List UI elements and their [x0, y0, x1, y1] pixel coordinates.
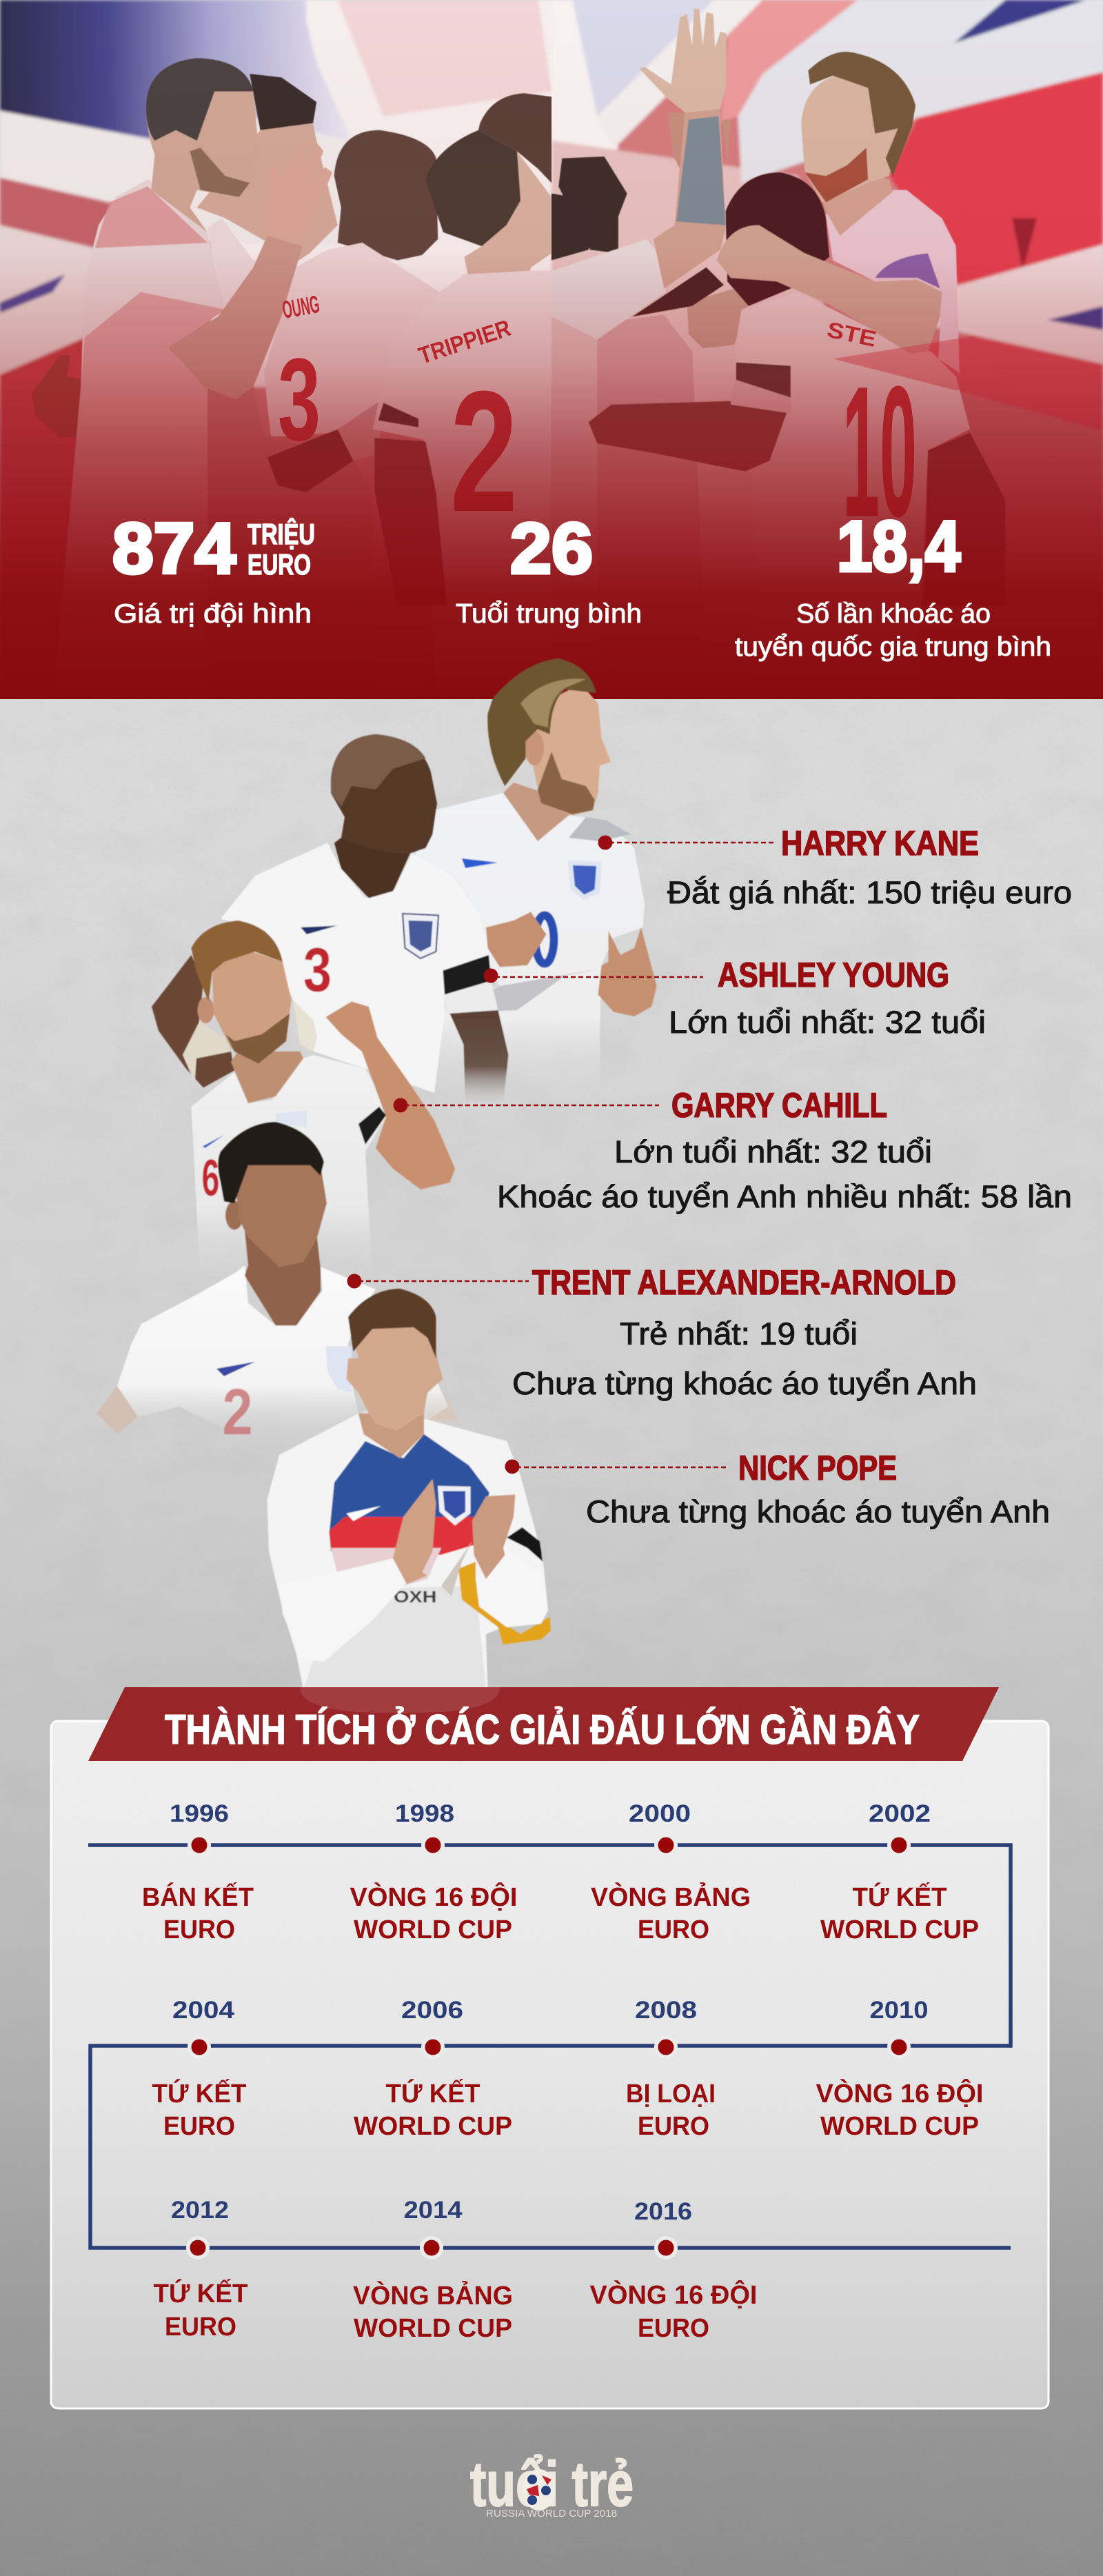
- hero shirt names and numbers: STE: [825, 317, 878, 352]
- hero red gradient overlay: [0, 0, 1103, 699]
- callout: Garry Cahill: GARRY CAHILL: [671, 1086, 887, 1125]
- callout: Garry Cahill: [393, 1086, 1072, 1214]
- callouts and captions: [347, 824, 1072, 1529]
- timeline years: 2008: [635, 1997, 697, 2024]
- callout: Trent Alexander-Arnold: TRENT ALEXANDER-ARNOLD: [532, 1263, 956, 1302]
- player: Trent Alexander-Arnold: [97, 1122, 458, 1449]
- timeline years: 2012: [171, 2197, 229, 2224]
- icon: world cup ball: [523, 2469, 556, 2510]
- timeline results: TỨ KẾT: [153, 2278, 248, 2308]
- callout: Harry Kane: HARRY KANE: [781, 824, 979, 863]
- timeline years: 2006: [401, 1997, 463, 2024]
- timeline results: VÒNG BẢNG: [591, 1882, 751, 1912]
- hero shirt names and numbers: TRIPPIER: [416, 315, 514, 370]
- stat: average age: [456, 509, 642, 629]
- timeline years: 2016: [634, 2198, 692, 2225]
- timeline results: VÒNG 16 ĐỘI: [816, 2077, 983, 2109]
- timeline results: WORLD CUP: [354, 2314, 512, 2343]
- timeline dots: [186, 1833, 911, 2260]
- callout: Garry Cahill: Khoác áo tuyển Anh nhiều nhất: 58 lần: [497, 1179, 1072, 1214]
- title banner: THÀNH TÍCH Ở CÁC GIẢI ĐẤU LỚN GẦN ĐÂY: [165, 1707, 920, 1753]
- timeline results: EURO: [163, 1915, 235, 1944]
- stat: average caps: [735, 507, 1051, 662]
- hero shirt names and numbers: OUNG: [280, 290, 322, 324]
- stat: average age: 26: [510, 509, 593, 589]
- player: Ashley Young: 3: [303, 936, 332, 1005]
- timeline years: 1996: [170, 1800, 229, 1827]
- timeline results: VÒNG 16 ĐỘI: [590, 2279, 757, 2310]
- timeline results: EURO: [165, 2313, 236, 2342]
- panel: hero team photo with stats: [0, 0, 1103, 703]
- stat: average age: Tuổi trung bình: [456, 599, 642, 629]
- timeline results: TỨ KẾT: [852, 1882, 947, 1912]
- timeline results: [142, 1881, 983, 2343]
- timeline years: 2010: [870, 1997, 928, 2024]
- stat: average caps: tuyển quốc gia trung bình: [735, 632, 1051, 662]
- player: Ashley Young: [152, 734, 509, 1103]
- callout: Ashley Young: ASHLEY YOUNG: [718, 956, 949, 994]
- logo: Tuoi Tre Russia World Cup 2018: tuổi trẻ: [470, 2449, 634, 2519]
- hero shirt names and numbers: [278, 290, 917, 556]
- timeline results: WORLD CUP: [820, 2112, 979, 2141]
- hero flag backdrop: [0, 0, 1103, 594]
- timeline results: BÁN KẾT: [142, 1882, 254, 1912]
- stat: squad value: TRIỆU: [247, 517, 315, 550]
- timeline results: WORLD CUP: [354, 1915, 512, 1944]
- timeline results: TỨ KẾT: [386, 2078, 480, 2109]
- timeline results: VÒNG BẢNG: [353, 2280, 513, 2311]
- stat: squad value: [112, 509, 315, 629]
- hero shirt names and numbers: 2: [450, 355, 518, 547]
- timeline years: 1998: [395, 1800, 454, 1827]
- stat: squad value: Giá trị đội hình: [114, 599, 312, 629]
- timeline years: 2000: [629, 1800, 691, 1827]
- callout: Ashley Young: Lớn tuổi nhất: 32 tuổi: [669, 1005, 986, 1040]
- stat: squad value: EURO: [247, 548, 311, 581]
- hero shirt names and numbers: 3: [278, 334, 321, 465]
- timeline years: 2014: [404, 2197, 463, 2224]
- logo: Tuoi Tre Russia World Cup 2018: RUSSIA WORLD CUP 2018: [486, 2508, 617, 2519]
- timeline results: EURO: [638, 2314, 709, 2343]
- callout: Harry Kane: Đắt giá nhất: 150 triệu euro: [667, 875, 1072, 910]
- timeline results: WORLD CUP: [820, 1915, 979, 1944]
- timeline years: 2004: [172, 1997, 235, 2024]
- callout: Nick Pope: [505, 1449, 1050, 1529]
- hero players right half: [552, 9, 1009, 703]
- timeline years: [170, 1800, 931, 2225]
- stat: average caps: Số lần khoác áo: [796, 599, 991, 629]
- callout: Harry Kane: [598, 824, 1072, 910]
- stat: squad value: 874: [112, 509, 236, 589]
- hero players left half: [32, 58, 552, 703]
- timeline results: VÒNG 16 ĐỘI: [350, 1881, 517, 1912]
- timeline results: TỨ KẾT: [152, 2078, 247, 2109]
- timeline results: EURO: [638, 1915, 709, 1944]
- callout: Nick Pope: Chưa từng khoác áo tuyển Anh: [586, 1494, 1050, 1529]
- timeline years: 2002: [869, 1800, 931, 1827]
- panel: tournament results: [51, 1687, 1049, 2408]
- callout: Trent Alexander-Arnold: Chưa từng khoác áo tuyển Anh: [512, 1366, 977, 1401]
- player: Nick Pope: OXH: [394, 1588, 437, 1607]
- player: Harry Kane: [414, 658, 656, 1093]
- title banner: [88, 1687, 999, 1761]
- timeline results: BỊ LOẠI: [626, 2080, 716, 2109]
- timeline path: [88, 1845, 1011, 2248]
- player: Gary Cahill: 6: [201, 1149, 219, 1207]
- callout: Ashley Young: [484, 956, 986, 1040]
- player: Nick Pope: [267, 1289, 551, 1689]
- timeline results: WORLD CUP: [354, 2112, 512, 2141]
- callout: Trent Alexander-Arnold: Trẻ nhất: 19 tuổi: [620, 1316, 858, 1351]
- timeline results: EURO: [638, 2112, 709, 2141]
- callout: Garry Cahill: Lớn tuổi nhất: 32 tuổi: [614, 1134, 932, 1169]
- player: Gary Cahill: [192, 920, 455, 1276]
- player: Trent Alexander-Arnold: 2: [222, 1376, 252, 1449]
- panel: hero team photo with stats: 10: [842, 348, 917, 556]
- player cutouts group: [97, 658, 656, 1689]
- timeline results: EURO: [163, 2112, 235, 2141]
- stat: average caps: 18,4: [837, 507, 960, 587]
- callout: Trent Alexander-Arnold: [347, 1263, 977, 1401]
- callout: Nick Pope: NICK POPE: [738, 1449, 897, 1487]
